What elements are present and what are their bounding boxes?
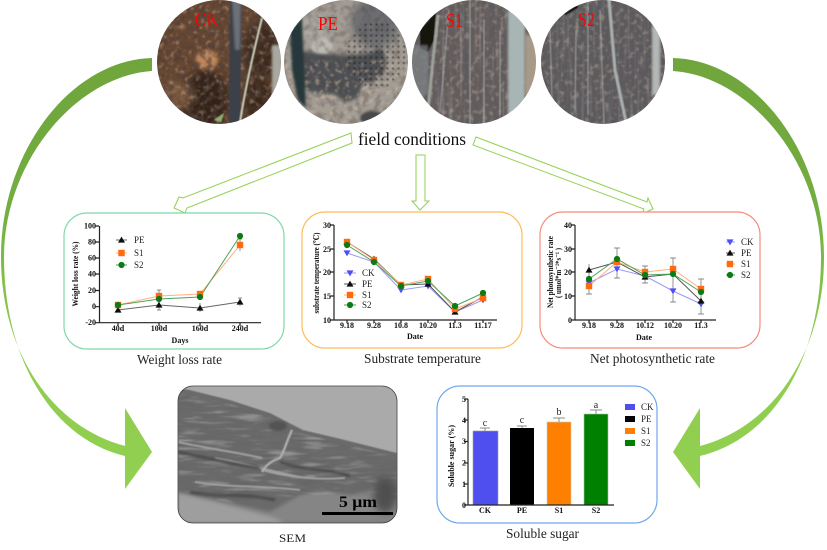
line chart: substrate temperature: S2 xyxy=(362,300,372,310)
panel: SEM micrograph xyxy=(178,386,397,523)
bar chart: soluble sugar: 1 xyxy=(462,480,466,489)
bar chart: soluble sugar: S2 xyxy=(592,506,600,515)
heading: field conditions: field conditions xyxy=(358,129,466,149)
bar chart: soluble sugar: CK xyxy=(641,402,654,412)
line chart: net photosynthetic rate: 10.20 xyxy=(664,321,682,330)
line chart: substrate temperature: 9.18 xyxy=(340,321,354,330)
line chart: net photosynthetic rate: ( umol*m⁻²*s⁻¹ ) xyxy=(554,248,563,298)
bar chart: soluble sugar: PE xyxy=(641,414,652,424)
caption: weight loss rate: Weight loss rate xyxy=(137,353,222,368)
photo labels: CK xyxy=(195,9,219,31)
line chart: weight loss rate: PE xyxy=(134,235,145,245)
panel: soluble sugar xyxy=(437,386,657,523)
panel: weight loss rate xyxy=(64,213,284,349)
line chart: net photosynthetic rate: PE xyxy=(741,248,752,258)
line chart: weight loss rate: 0 xyxy=(92,302,96,311)
line chart: substrate temperature xyxy=(312,221,497,341)
bar chart: soluble sugar: c xyxy=(520,415,525,426)
arrow: right curved arrow from photos to soluble sugar xyxy=(673,58,824,489)
line chart: net photosynthetic rate: Net photosynthetic rate xyxy=(546,236,555,308)
line chart: weight loss rate: Days xyxy=(172,336,188,345)
photo: S1 biodegradable film xyxy=(412,0,536,124)
bar chart: soluble sugar: Soluble sugar (%) xyxy=(447,425,456,487)
line chart: substrate temperature: 30 xyxy=(323,221,331,230)
photo: PE perforated film xyxy=(284,0,408,124)
bar chart: soluble sugar: S2 xyxy=(641,438,651,448)
line chart: net photosynthetic rate: 11.3 xyxy=(694,321,708,330)
arrow: field conditions to net photosynthetic rate xyxy=(473,137,653,214)
line chart: weight loss rate: 100 xyxy=(84,222,96,230)
line chart: substrate temperature: S1 xyxy=(362,290,372,300)
line chart: net photosynthetic rate: 9.28 xyxy=(610,321,624,330)
line chart: substrate temperature: 15 xyxy=(323,292,331,301)
bar chart: soluble sugar: a xyxy=(594,400,599,411)
line chart: substrate temperature: 10.8 xyxy=(394,321,408,330)
line chart: substrate temperature: 11.3 xyxy=(448,321,462,330)
line chart: weight loss rate: S1 xyxy=(134,248,144,258)
line chart: net photosynthetic rate: CK xyxy=(741,237,754,247)
line chart: weight loss rate: 240d xyxy=(232,324,249,333)
panel: net photosynthetic rate xyxy=(540,212,760,348)
arrow: field conditions to weight loss rate xyxy=(174,133,352,213)
arrow: left curved arrow from photos to SEM xyxy=(1,58,152,489)
bar chart: soluble sugar: 2 xyxy=(462,458,466,468)
line chart: substrate temperature: 9.28 xyxy=(367,321,381,330)
caption: net photosynthetic rate: Net photosynthetic rate xyxy=(590,352,715,367)
line chart: net photosynthetic rate: S2 xyxy=(741,270,751,280)
line chart: net photosynthetic rate: 0 xyxy=(568,316,572,325)
line chart: weight loss rate xyxy=(71,222,261,345)
bar chart: soluble sugar: 0 xyxy=(462,501,466,510)
line chart: substrate temperature: 11.17 xyxy=(474,321,492,330)
line chart: substrate temperature: 10 xyxy=(323,316,331,325)
bar chart: soluble sugar: S1 xyxy=(555,506,563,515)
line chart: net photosynthetic rate: S1 xyxy=(741,259,751,269)
photo labels: S2 xyxy=(578,9,595,31)
panel: substrate temperature xyxy=(302,212,522,348)
line chart: substrate temperature: substrate temperature (℃) xyxy=(312,232,321,314)
photo labels xyxy=(195,9,595,35)
arrow: field conditions to substrate temperature xyxy=(412,155,429,210)
line chart: weight loss rate: S2 xyxy=(134,260,144,270)
photo labels: PE xyxy=(318,13,338,35)
line chart: weight loss rate: 80 xyxy=(88,238,96,246)
photo labels: S1 xyxy=(446,10,463,32)
line chart: weight loss rate: 160d xyxy=(192,324,209,333)
line chart: weight loss rate: 100d xyxy=(151,324,168,333)
bar chart: soluble sugar: PE xyxy=(517,506,527,515)
bar chart: soluble sugar: 4 xyxy=(462,416,466,425)
line chart: net photosynthetic rate: 9.18 xyxy=(582,321,596,330)
line chart: net photosynthetic rate: 30 xyxy=(564,245,572,254)
bar chart: soluble sugar: CK xyxy=(479,506,492,515)
line chart: substrate temperature: Date xyxy=(407,332,423,341)
line chart: substrate temperature: 20 xyxy=(323,268,331,277)
line chart: net photosynthetic rate: 10 xyxy=(564,292,572,301)
bar chart: soluble sugar: 5 xyxy=(462,395,466,404)
caption: soluble sugar: Soluble sugar xyxy=(506,527,579,542)
line chart: weight loss rate: 20 xyxy=(88,286,96,295)
bar chart: soluble sugar xyxy=(447,395,654,515)
bar chart: soluble sugar: 3 xyxy=(462,437,466,446)
line chart: net photosynthetic rate: 20 xyxy=(564,268,572,277)
line chart: net photosynthetic rate: 10.12 xyxy=(636,321,654,330)
line chart: substrate temperature: 10.20 xyxy=(419,321,437,330)
photo: S2 biodegradable film xyxy=(541,0,665,124)
scale bar xyxy=(322,494,393,515)
line chart: substrate temperature: PE xyxy=(362,279,373,289)
line chart: net photosynthetic rate: Date xyxy=(636,333,652,342)
line chart: net photosynthetic rate: 40 xyxy=(564,221,572,230)
caption: SEM: SEM xyxy=(279,531,306,545)
bar chart: soluble sugar: c xyxy=(483,418,488,429)
line chart: weight loss rate: -20 xyxy=(85,318,96,327)
scale bar: 5 μm xyxy=(339,494,378,511)
bar chart: soluble sugar: b xyxy=(556,407,562,418)
bar chart: soluble sugar: S1 xyxy=(641,426,651,436)
line chart: net photosynthetic rate xyxy=(546,221,754,342)
caption: substrate temperature: Substrate temperature xyxy=(364,352,481,367)
line chart: weight loss rate: 40d xyxy=(112,324,125,333)
photo: CK bare soil xyxy=(157,0,281,124)
line chart: substrate temperature: CK xyxy=(362,268,375,278)
line chart: weight loss rate: 40 xyxy=(88,270,96,278)
line chart: substrate temperature: 25 xyxy=(323,245,331,254)
line chart: weight loss rate: Weight loss rate (%) xyxy=(71,241,80,306)
line chart: weight loss rate: 60 xyxy=(88,254,96,262)
